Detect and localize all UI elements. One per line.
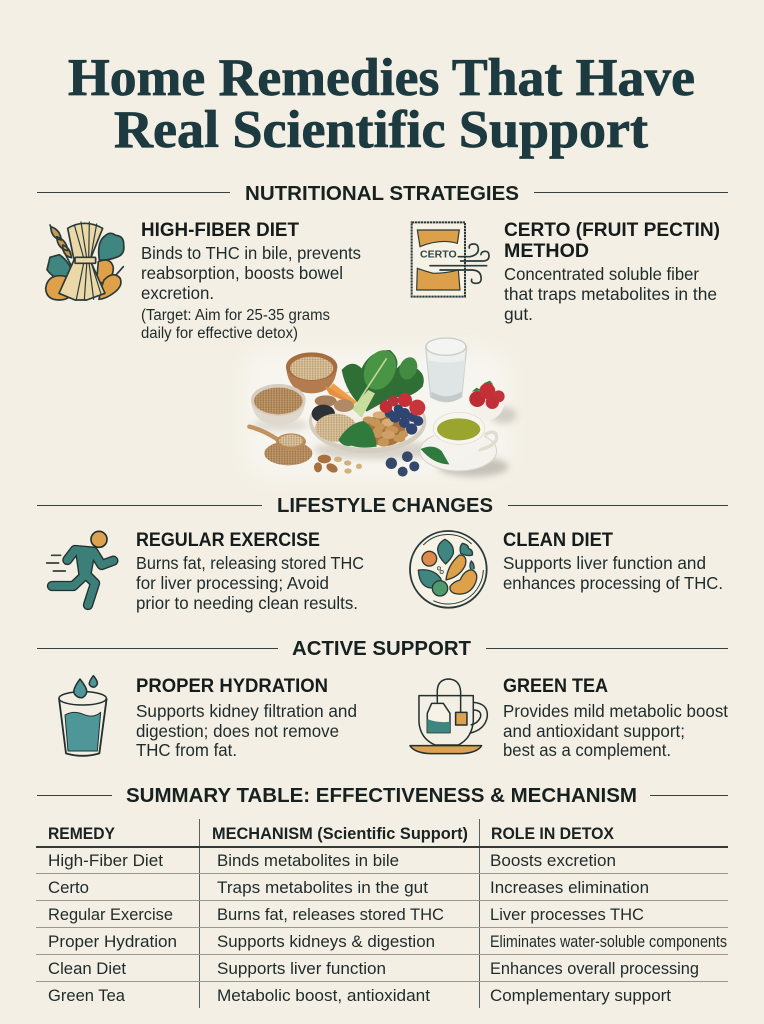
table rows: Metabolic boost, antioxidant [217, 986, 430, 1005]
text: high-fiber diet: daily for effective detox) [141, 325, 298, 342]
text: green tea: GREEN TEA [503, 675, 608, 697]
strawberries on plate [380, 393, 425, 416]
text: certo method [504, 219, 720, 324]
panel: nutritional strategies [37, 182, 728, 478]
table rows: Liver processes THC [490, 905, 644, 924]
text: certo method: METHOD [504, 240, 589, 262]
table rows: Increases elimination [490, 878, 649, 897]
text: certo method: that traps metabolites in the [504, 284, 717, 304]
loose blueberries [386, 451, 419, 477]
title [68, 49, 695, 159]
icon: certo packet [412, 222, 489, 297]
icon: fiber bundle with vegetables [46, 222, 124, 300]
text: regular exercise: prior to needing clean results. [136, 593, 358, 613]
text: high-fiber diet: HIGH-FIBER DIET [141, 219, 299, 241]
text: proper hydration: THC from fat. [136, 740, 237, 760]
table rows: Boosts excretion [490, 851, 616, 870]
icon: certo packet: CERTO [420, 249, 457, 260]
text: regular exercise: Burns fat, releasing stored THC [136, 553, 364, 573]
text: proper hydration [136, 675, 357, 760]
text: proper hydration: digestion; does not remove [136, 721, 339, 741]
panel: summary table [36, 784, 728, 1008]
text: high-fiber diet [141, 219, 361, 342]
text: regular exercise [136, 529, 364, 613]
table header: REMEDY [48, 825, 115, 843]
text: green tea: and antioxidant support; [503, 721, 685, 741]
text: green tea [503, 675, 728, 760]
green tea cup [420, 412, 497, 471]
spinach on plate [338, 421, 377, 448]
table rows: Eliminates water-soluble components [490, 932, 727, 951]
spoon and seeds [249, 427, 312, 465]
nuts on plate [364, 414, 406, 446]
text: green tea: best as a complement. [503, 740, 671, 760]
table grid [36, 819, 728, 1008]
text: certo method: Concentrated soluble fiber [504, 264, 699, 284]
icon: runner [47, 531, 113, 605]
table rows: High-Fiber Diet [48, 851, 163, 870]
title: Home Remedies That Have [68, 49, 695, 107]
table rows: Burns fat, releases stored THC [217, 905, 444, 924]
icon: tea cup [410, 679, 487, 754]
table rows: Supports kidneys & digestion [217, 932, 435, 951]
text: clean diet [503, 529, 723, 593]
icon: vegetable plate [410, 531, 487, 608]
heading: active support: ACTIVE SUPPORT [292, 637, 471, 660]
table rows: Proper Hydration [48, 932, 177, 951]
text: regular exercise: REGULAR EXERCISE [136, 529, 320, 551]
dinner plate [309, 345, 426, 453]
heading: lifestyle changes: LIFESTYLE CHANGES [277, 494, 493, 517]
text: clean diet: Supports liver function and [503, 553, 706, 573]
title: Real Scientific Support [114, 101, 648, 159]
blueberries on plate [385, 404, 423, 435]
table rows: Complementary support [490, 986, 671, 1005]
text: certo method: gut. [504, 304, 533, 324]
text: clean diet: CLEAN DIET [503, 529, 613, 551]
table rows: Supports liver function [217, 959, 386, 978]
table rows: Green Tea [48, 986, 126, 1005]
icon: water glass [59, 676, 107, 756]
table rows: Traps metabolites in the gut [217, 878, 428, 897]
wooden bowl [286, 352, 337, 393]
greens [342, 345, 424, 418]
text: green tea: Provides mild metabolic boost [503, 701, 728, 721]
table rows: Enhances overall processing [490, 959, 699, 978]
table rows: Clean Diet [48, 959, 126, 978]
strawberry bowl [467, 381, 506, 420]
text: high-fiber diet: reabsorption, boosts bowel [141, 263, 343, 283]
text: high-fiber diet: excretion. [141, 283, 214, 303]
table rows: Regular Exercise [48, 905, 173, 924]
panel: active support [37, 637, 728, 760]
table header: MECHANISM (Scientific Support) [212, 825, 468, 843]
table rows [48, 851, 727, 1005]
table rows: Certo [48, 878, 89, 897]
water glass [426, 338, 467, 402]
text: clean diet: enhances processing of THC. [503, 573, 723, 593]
panel: lifestyle changes [37, 494, 728, 613]
text: proper hydration: Supports kidney filtration and [136, 701, 357, 721]
text: high-fiber diet: Binds to THC in bile, prevents [141, 243, 361, 263]
heading: nutritional strategies: NUTRITIONAL STRATEGIES [245, 182, 519, 205]
text: regular exercise: for liver processing; Avoid [136, 573, 329, 593]
table rows: Binds metabolites in bile [217, 851, 399, 870]
image: healthy food plate [243, 338, 517, 478]
heading: summary table: SUMMARY TABLE: EFFECTIVENESS & MECHANISM [126, 784, 637, 807]
text: certo method: CERTO (FRUIT PECTIN) [504, 219, 720, 241]
table header: ROLE IN DETOX [491, 825, 614, 843]
text: proper hydration: PROPER HYDRATION [136, 675, 328, 697]
table header [48, 825, 614, 843]
nuts [314, 455, 362, 474]
ceramic bowl [251, 384, 306, 425]
text: high-fiber diet: (Target: Aim for 25-35 grams [141, 307, 330, 324]
